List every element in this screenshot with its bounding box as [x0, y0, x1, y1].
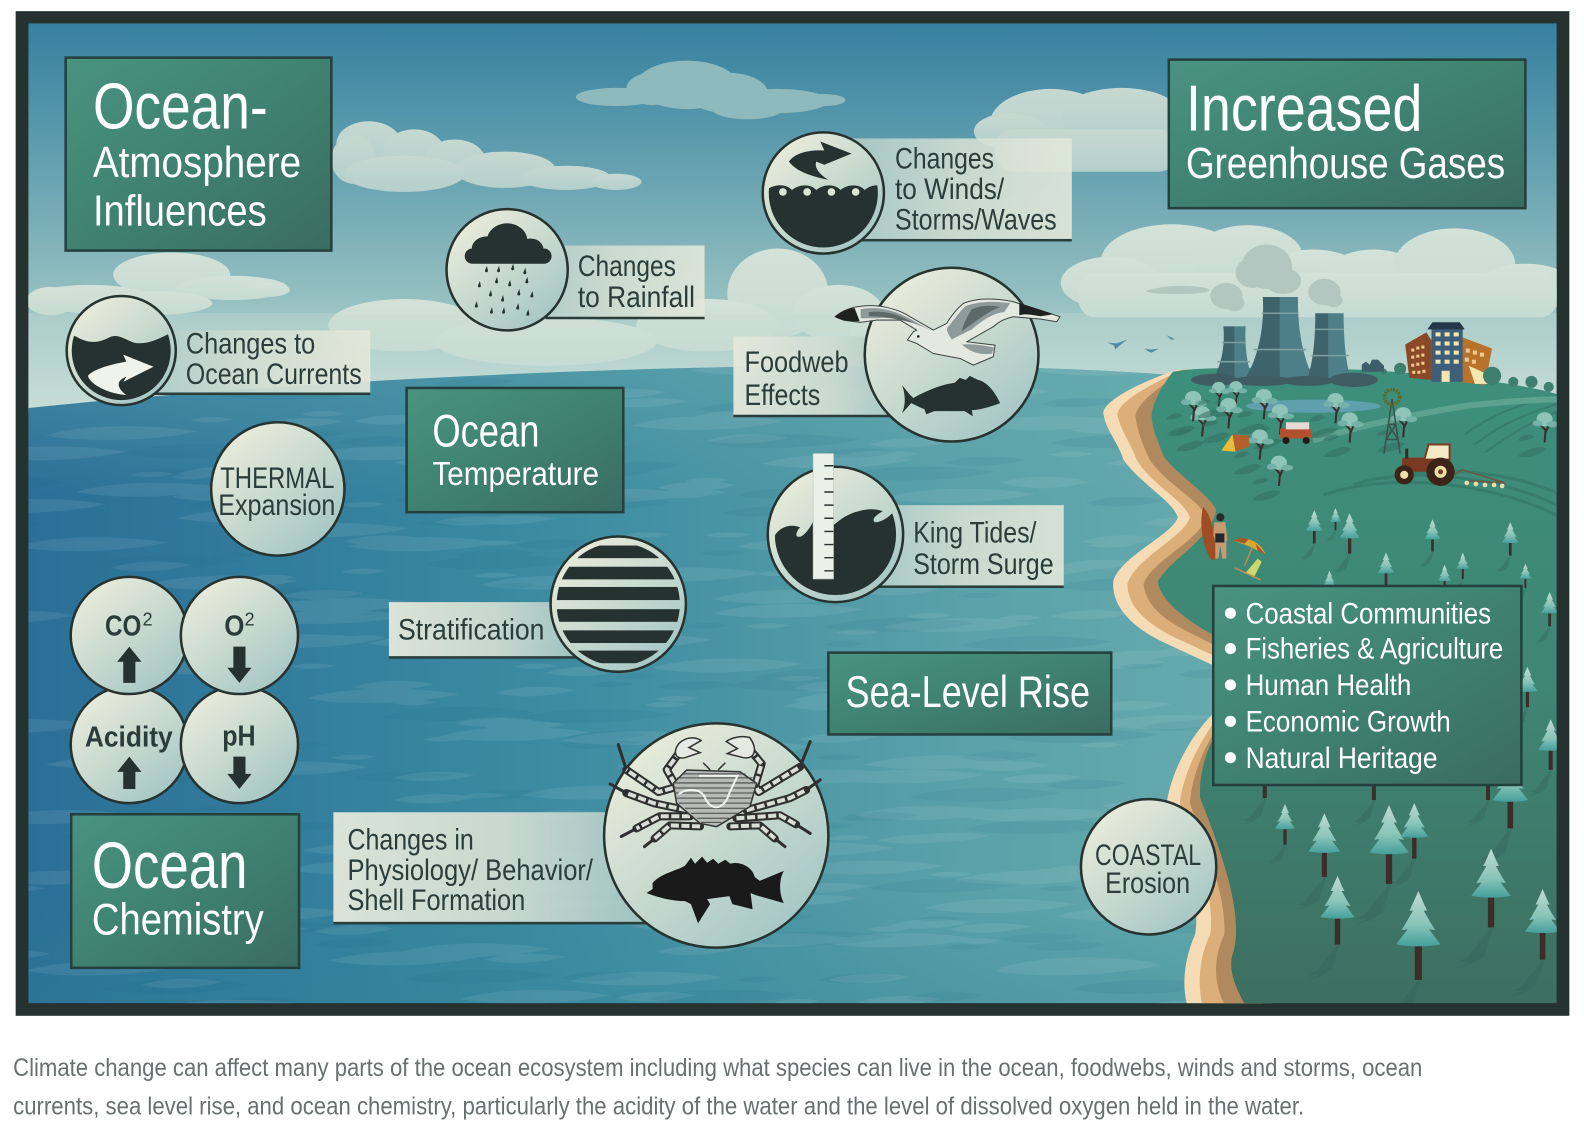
- indicator: pH down: pH: [222, 720, 256, 752]
- callout: Changes to Winds/Storms/Waves: [763, 132, 1072, 254]
- callout: Changes to Winds/Storms/Waves: to Winds/: [895, 173, 1005, 206]
- callout: King Tides/Storm Surge: Storm Surge: [913, 548, 1054, 581]
- heading panel: Sea-Level Rise: Sea-Level Rise: [846, 668, 1090, 717]
- indicator: CO2 up: CO: [105, 609, 141, 641]
- indicator: Acidity up: [71, 686, 188, 803]
- callout: Changes in Physiology/Behavior/Shell Formation: Physiology/ Behavior/: [348, 854, 594, 887]
- indicator: O2 down: O: [224, 609, 244, 641]
- callout: King Tides/Storm Surge: [768, 454, 1064, 606]
- pond: [1246, 400, 1381, 413]
- heading panel: Ocean Chemistry: Ocean: [92, 829, 247, 902]
- tent: [1221, 434, 1250, 452]
- callout: King Tides/Storm Surge: King Tides/: [913, 517, 1037, 550]
- callout: Thermal Expansion: THERMAL: [220, 462, 334, 495]
- olive trees: [1167, 381, 1559, 501]
- indicator: O2 down: [181, 577, 298, 694]
- heading panel: Ocean Temperature: Ocean: [432, 406, 539, 457]
- callout: Changes to Ocean Currents: Ocean Currents: [186, 358, 362, 391]
- callout: Foodweb Effects: Effects: [745, 379, 820, 412]
- indicator: CO2 up: 2: [142, 609, 153, 629]
- icon: crab: [610, 737, 820, 847]
- callout: Foodweb Effects: Foodweb: [745, 346, 849, 379]
- water ripples: [28, 367, 1222, 1004]
- chemistry indicators cluster: [71, 577, 298, 803]
- heading panel: Ocean-Atmosphere Influences: Ocean-: [93, 69, 268, 142]
- heading panel: Increased Greenhouse Gases: Greenhouse Gases: [1186, 140, 1505, 188]
- callout: Changes to Rainfall: Changes: [578, 250, 676, 283]
- icon: stratified layers: [556, 546, 680, 664]
- farmland furrows and road: [1313, 396, 1557, 515]
- smoke: [1147, 245, 1343, 311]
- town buildings: [1362, 322, 1554, 392]
- icon: rain cloud: [465, 223, 552, 316]
- callout: Coastal Erosion: COASTAL: [1095, 839, 1201, 872]
- heading panel: Ocean Chemistry: Chemistry: [92, 895, 264, 944]
- sky: [28, 23, 1557, 412]
- callout: Changes to Ocean Currents: [67, 296, 370, 405]
- callout: Stratification: Stratification: [398, 613, 544, 646]
- callout: Thermal Expansion: [211, 422, 344, 556]
- callout: Changes in Physiology/Behavior/Shell Formation: [333, 723, 828, 948]
- icon: tuna: [902, 376, 1000, 416]
- heading panel: Ocean Chemistry: [71, 814, 299, 968]
- heading panel: Ocean Temperature: [407, 388, 623, 512]
- windmill: [1384, 389, 1400, 454]
- beach chair and umbrella: [1233, 538, 1266, 580]
- indicator: Acidity up: Acidity: [85, 721, 173, 753]
- caption: [13, 1054, 1422, 1120]
- impacts list panel: Fisheries & Agriculture: [1246, 633, 1503, 666]
- callout: Foodweb Effects: [733, 268, 1060, 441]
- callout: Changes to Rainfall: [447, 209, 705, 330]
- icon: seagull: [835, 299, 1060, 365]
- impacts list panel: Coastal Communities: [1246, 597, 1491, 630]
- ocean: [28, 367, 1272, 1004]
- heading panel: Ocean Temperature: Temperature: [432, 456, 599, 493]
- callout: Stratification: [389, 536, 691, 672]
- indicator: O2 down: 2: [244, 609, 255, 629]
- indicator: CO2 up: [71, 577, 188, 694]
- land and beach: [1103, 368, 1557, 1004]
- heading panel: Ocean-Atmosphere Influences: Atmosphere: [93, 139, 301, 187]
- pine forest: [1245, 508, 1557, 980]
- callout: Changes to Rainfall: to Rainfall: [578, 281, 695, 314]
- heading panel: Ocean-Atmosphere Influences: Influences: [93, 187, 267, 235]
- clouds: [26, 61, 1576, 414]
- distant birds: [1107, 335, 1175, 353]
- heading panel: Increased Greenhouse Gases: [1169, 60, 1525, 208]
- callout: Coastal Erosion: Erosion: [1105, 867, 1190, 900]
- callout: Changes in Physiology/Behavior/Shell Formation: Shell Formation: [348, 884, 525, 917]
- caption: currents, sea level rise, and ocean chemistry, particularly the acidity of the water and the level of dissolved oxygen held in the water.: [13, 1092, 1304, 1120]
- icon: wind arrow and waves: [768, 141, 881, 253]
- icon: rockfish: [647, 857, 784, 923]
- heading panel: Ocean-Atmosphere Influences: [66, 58, 331, 251]
- caption: Climate change can affect many parts of the ocean ecosystem including what species can live in the ocean, foodwebs, winds and storms, ocean: [13, 1054, 1422, 1082]
- heading panel: Sea-Level Rise: [828, 653, 1111, 734]
- callout: Changes in Physiology/Behavior/Shell Formation: Changes in: [348, 824, 474, 857]
- callout: Coastal Erosion: [1081, 799, 1216, 934]
- impacts list panel: Human Health: [1246, 669, 1411, 702]
- power station cooling towers: [1147, 245, 1378, 387]
- impacts list panel: Economic Growth: [1246, 705, 1451, 738]
- icon: waves and tide gauge: [774, 453, 896, 595]
- callout: Changes to Winds/Storms/Waves: Changes: [895, 143, 994, 176]
- heading panel: Increased Greenhouse Gases: Increased: [1186, 71, 1422, 144]
- impacts list panel: Natural Heritage: [1246, 742, 1438, 775]
- callout: Changes to Ocean Currents: Changes to: [186, 328, 315, 361]
- jeep: [1280, 422, 1311, 444]
- callout: Changes to Winds/Storms/Waves: Storms/Waves: [895, 203, 1057, 236]
- surfer and surfboard: [1201, 507, 1227, 560]
- indicator: pH down: [181, 686, 298, 803]
- callout: Thermal Expansion: Expansion: [218, 489, 335, 522]
- impacts list panel: [1213, 586, 1521, 785]
- tractor with plough: [1395, 445, 1505, 488]
